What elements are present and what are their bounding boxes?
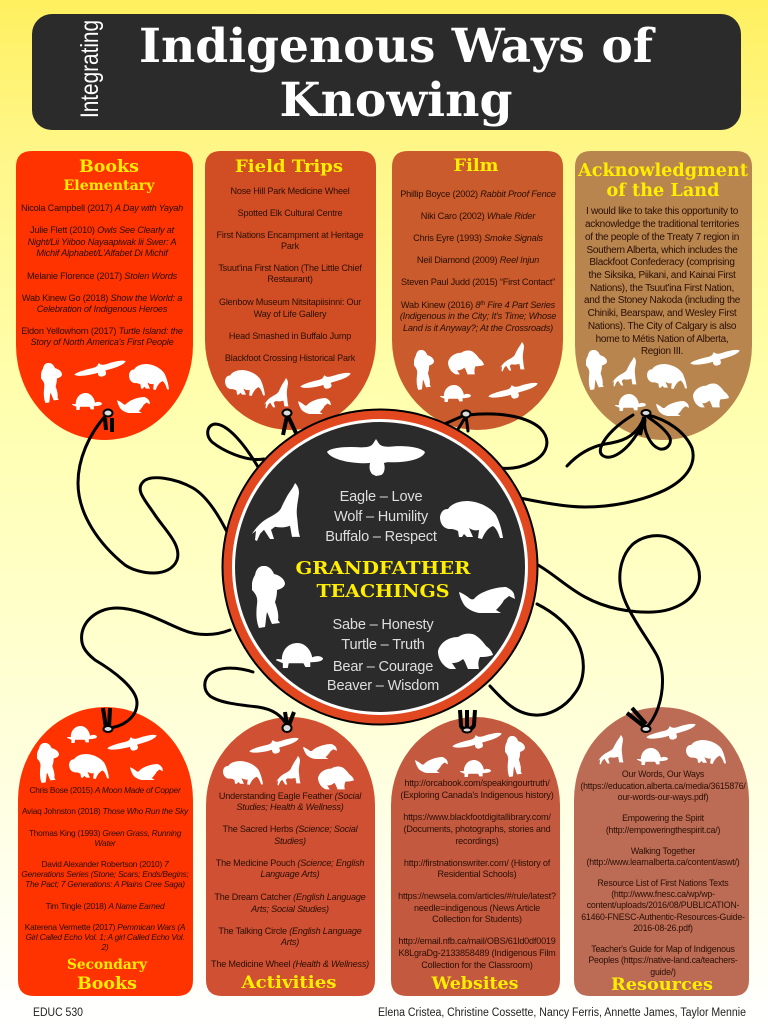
book list: Celebration of Indigenous Heroes [37, 304, 168, 314]
teachings: lower list: Beaver – Wisdom [327, 678, 439, 694]
heading: Acknowledgment of the Land [577, 161, 748, 201]
heading: Resources: Resources [611, 975, 713, 995]
resource list: (http://www.fnesc.ca/wp/wp- [611, 889, 715, 899]
teachings: upper list: Buffalo – Respect [325, 529, 437, 545]
resource list: Empowering the Spirit [622, 813, 705, 823]
grommets and knots [103, 410, 650, 732]
resource list: Walking Together [631, 846, 695, 856]
animal icons [415, 729, 525, 777]
panel: Secondary Books [18, 707, 193, 996]
resource list: guide/) [650, 967, 676, 977]
animal icons [41, 356, 169, 413]
string strands [78, 414, 699, 728]
field trip list [217, 186, 364, 363]
book list: Michif Alphabet/L'Alfabet Di Michif [36, 248, 169, 258]
animal icons [223, 734, 354, 789]
resource list: our-words-our-ways.pdf) [618, 792, 709, 802]
book list: Melanie Florence (2017) Stolen Words [27, 271, 178, 281]
acknowledgment text: Nations), the Tsuut'ina First Nation, [590, 283, 734, 294]
acknowledgment text: Blackfoot Confederacy (comprising [589, 257, 735, 268]
book list: Thomas King (1993) Green Grass, Running [29, 828, 182, 838]
activity list [211, 791, 369, 969]
activity list: Arts; Social Studies) [250, 904, 329, 914]
field trip list: First Nations Encampment at Heritage [217, 230, 364, 240]
film list: Steven Paul Judd (2015) “First Contact” [401, 277, 555, 287]
heading: Books Elementary: Elementary [64, 178, 156, 194]
activity list: The Sacred Herbs (Science; Social [223, 824, 359, 834]
panel: Acknowledgment of the Land [575, 151, 752, 440]
film list: (Indigenous in the City; It's Time; Whose [400, 311, 556, 321]
animal icons [598, 720, 726, 765]
heading: Acknowledgment of the Land: of the Land [606, 181, 720, 201]
website list: recordings) [455, 836, 499, 846]
book list: Nicola Campbell (2017) A Day with Yayah [21, 203, 183, 213]
acknowledgment text [584, 206, 741, 357]
website list: http://orcabook.com/speakingourtruth/ [404, 778, 550, 788]
main title: Indigenous Ways of [139, 19, 656, 74]
acknowledgment text: Chiniki, Bearspaw, and Wesley First [588, 308, 737, 319]
website list: https://newsela.com/articles/#/rule/latest? [398, 891, 556, 901]
website list: https://www.blackfootdigitallibrary.com/ [403, 812, 551, 822]
activity list: The Dream Catcher (English Language [214, 892, 366, 902]
film list: Neil Diamond (2009) Reel Injun [417, 255, 539, 265]
teachings: upper list [325, 489, 437, 545]
website list: (Exploring Canada's Indigenous history) [400, 790, 554, 800]
heading: Acknowledgment of the Land: Acknowledgment [577, 161, 748, 181]
book list: Generations Series (Stone; Scars; Ends/Begins; [21, 869, 190, 879]
book list: David Alexander Robertson (2010) 7 [42, 859, 169, 869]
teachings: upper list: Eagle – Love [340, 489, 422, 505]
main title: Knowing [280, 73, 512, 128]
main title [139, 19, 656, 128]
animal icons [225, 369, 353, 414]
heading: Secondary Books [67, 957, 148, 994]
teachings: lower list: Bear – Courage [333, 659, 433, 675]
title banner [32, 14, 741, 130]
panel: Books Elementary [16, 151, 193, 440]
footer: authors: Elena Cristea, Christine Cossette, Nancy Ferris, Annette James, Taylor Mennie [378, 1007, 746, 1019]
book list: Eldon Yellowhorn (2017) Turtle Island: the [21, 326, 183, 336]
heading: Grandfather Teachings: GRANDFATHER [296, 558, 472, 579]
panel: Websites [391, 717, 560, 996]
website list: Residential Schools) [438, 869, 517, 879]
website list: (Documents, photographs, stories and [404, 824, 551, 834]
website list: K8LgraDg-2133858489 (Indigenous Film [398, 948, 556, 958]
field trip list: Glenbow Museum Nitsitapiisinni: Our [219, 297, 361, 307]
resource list: Our Words, Our Ways [622, 769, 705, 779]
heading: Field Trips: Field Trips [235, 157, 343, 177]
panel: Field Trips [205, 151, 376, 430]
acknowledgment text: of the people of the Treaty 7 region in [585, 232, 739, 243]
activity list: Language Arts) [260, 869, 320, 879]
book list: 2) [101, 942, 109, 952]
resource list: 61460-FNESC-Authentic-Resources-Guide- [581, 912, 745, 922]
acknowledgment text: the Siksika, Piikani, and Kainai First [588, 270, 736, 281]
acknowledgment text: Region III. [641, 346, 683, 357]
heading: Secondary Books: Books [77, 974, 137, 994]
side label: Integrating: Integrating [76, 20, 104, 118]
book list: Tim Tingle (2018) A Name Earned [46, 901, 165, 911]
acknowledgment text: Southern Alberta, which includes the [587, 245, 738, 256]
teachings: lower list [327, 617, 439, 694]
book list: Night/Lii Yiiboo Nayaapiwak lii Swer: A [28, 237, 176, 247]
acknowledgment text: Nations). The City of Calgary is also [588, 321, 737, 332]
film list: Land is it Anyway?; At the Crossroads) [403, 323, 553, 333]
book list: Story of North America's First People [30, 337, 174, 347]
book list: Water [95, 838, 117, 848]
resource list: Teacher's Guide for Map of Indigenous [591, 944, 736, 954]
book list: Katerena Vermette (2017) Pemmican Wars (A [25, 922, 186, 932]
resource list: content/uploads/2016/08/PUBLICATION- [587, 900, 740, 910]
acknowledgment text: and the Stoney Nakoda (including the [584, 295, 741, 306]
book list: Chris Bose (2015) A Moon Made of Copper [29, 785, 182, 795]
book list: Julie Flett (2010) Owls See Clearly at [30, 225, 175, 235]
acknowledgment text: I would like to take this opportunity to [586, 206, 739, 217]
teachings: lower list: Sabe – Honesty [332, 617, 434, 633]
heading: Grandfather Teachings: TEACHINGS [316, 581, 450, 602]
film list [400, 189, 556, 333]
heading: Grandfather Teachings [296, 558, 472, 602]
field trip list: Spotted Elk Cultural Centre [238, 208, 343, 218]
resource list: (http://empoweringthespirit.ca/) [606, 825, 720, 835]
website list [398, 778, 556, 970]
activity list: Understanding Eagle Feather (Social [219, 791, 362, 801]
field trip list: Blackfoot Crossing Historical Park [225, 353, 356, 363]
book list: The Pact; 7 Generations: A Plains Cree Saga) [25, 879, 185, 889]
activity list: Studies; Health & Wellness) [236, 802, 344, 812]
website list: Collection for the Classroom) [421, 960, 533, 970]
film list: Phillip Boyce (2002) Rabbit Proof Fence [400, 189, 556, 199]
film list: Niki Caro (2002) Whale Rider [421, 211, 536, 221]
film list: Wab Kinew (2016) 8 [401, 300, 480, 310]
book list [21, 203, 183, 347]
website list: http://firstnationswriter.com/ (History of [404, 858, 551, 868]
heading: Books Elementary [64, 157, 156, 194]
panel: Resources [574, 707, 749, 996]
acknowledgment text: acknowledge the traditional territories [585, 219, 739, 230]
activity list: Arts) [280, 937, 299, 947]
heading: Secondary Books: Secondary [67, 957, 148, 973]
panel: Activities [206, 717, 375, 996]
acknowledgment text: home to Métis Nation of Alberta, [596, 334, 728, 345]
resource list: Resource List of First Nations Texts [598, 878, 729, 888]
website list: needle=indigenous (News Article [414, 903, 540, 913]
footer: course code: EDUC 530 [33, 1007, 83, 1019]
heading: Websites: Websites [430, 974, 518, 994]
film list: Chris Eyre (1993) Smoke Signals [413, 233, 543, 243]
book list [21, 785, 190, 952]
resource list: (http://www.learnalberta.ca/content/aswt/) [587, 857, 740, 867]
animal icons [414, 342, 540, 405]
book list: Aviaq Johnston (2018) Those Who Run the Sky [22, 806, 189, 816]
field trip list: Tsuut'ina First Nation (The Little Chief [218, 263, 362, 273]
resource list [580, 769, 746, 977]
field trip list: Way of Life Gallery [254, 309, 327, 319]
teachings: lower list: Turtle – Truth [341, 637, 425, 653]
field trip list: Park [281, 241, 300, 251]
field trip list: Head Smashed in Buffalo Jump [229, 331, 351, 341]
film list: th [480, 301, 486, 307]
animal icons [252, 439, 515, 669]
teachings: upper list: Wolf – Humility [334, 509, 429, 525]
panel: Film [392, 151, 563, 430]
resource list: (https://education.alberta.ca/media/3615876/ [580, 781, 746, 791]
resource list: 2016-08-26.pdf) [633, 923, 693, 933]
central circle: Grandfather Teachings [222, 408, 538, 726]
website list: http://email.nfb.ca/mail/OBS/61ld0df0019 [398, 936, 556, 946]
activity list: The Medicine Pouch (Science; English [216, 858, 364, 868]
animal icons [37, 726, 163, 783]
activity list: The Talking Circle (English Language [218, 926, 362, 936]
book list: Wab Kinew Go (2018) Show the World: a [22, 293, 182, 303]
resource list: Peoples (https://native-land.ca/teachers- [588, 955, 738, 965]
website list: Collection for Students) [432, 914, 522, 924]
field trip list: Nose Hill Park Medicine Wheel [230, 186, 350, 196]
heading: Books Elementary: Books [79, 157, 139, 177]
film list: Fire 4 Part Series [485, 300, 556, 310]
field trip list: Restaurant) [267, 274, 313, 284]
heading: Activities: Activities [240, 973, 336, 993]
activity list: Studies) [274, 836, 306, 846]
book list: Girl Called Echo Vol. 1; A girl Called Echo Vol. [26, 932, 184, 942]
heading: Film: Film [454, 156, 499, 176]
activity list: The Medicine Wheel (Health & Wellness) [211, 959, 369, 969]
animal icons [586, 346, 742, 416]
